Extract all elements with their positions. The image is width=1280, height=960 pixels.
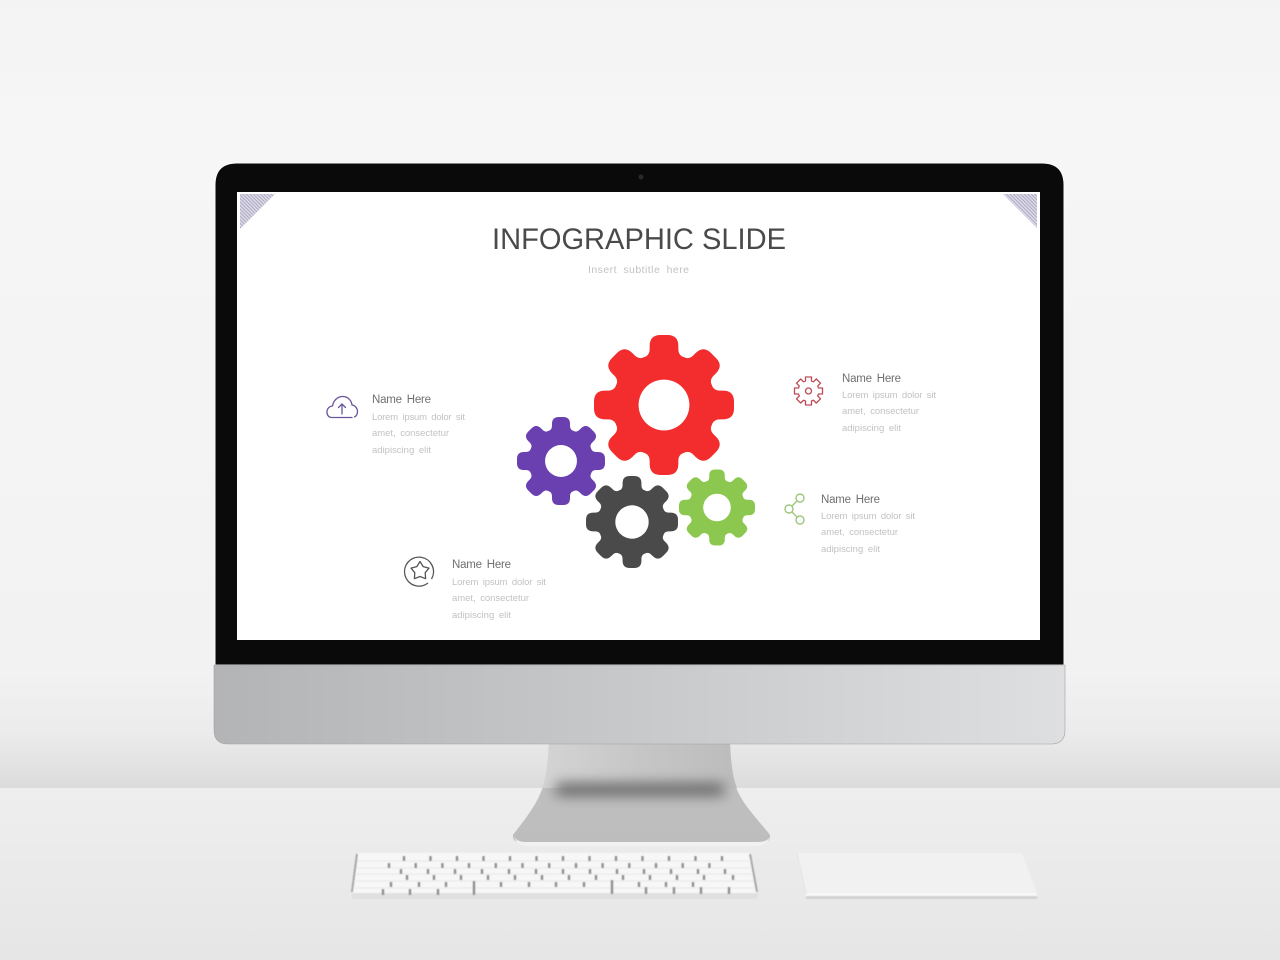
- keyboard: [352, 853, 758, 899]
- text: name: Name Here: [372, 394, 431, 406]
- text: description: [452, 577, 546, 621]
- text: description: Lorem ipsum dolor sit: [842, 390, 936, 401]
- text: description: [821, 511, 915, 555]
- slide screen: [237, 192, 1040, 640]
- text: description: Lorem ipsum dolor sit: [372, 412, 465, 423]
- red gear: [594, 335, 734, 475]
- icon: share nodes: [785, 494, 804, 524]
- purple gear: [517, 417, 605, 505]
- item: settings: [794, 373, 936, 434]
- keyboard key gaps: [383, 856, 733, 895]
- text: description: amet, consectetur: [821, 527, 898, 538]
- webcam: [638, 174, 644, 180]
- corner decoration right: [1003, 194, 1037, 228]
- title: INFOGRAPHIC SLIDE: [492, 223, 786, 256]
- item: upload: [327, 394, 465, 456]
- green gear: [679, 470, 755, 546]
- monitor stand: [513, 744, 770, 846]
- subtitle: Insert subtitle here: [588, 264, 689, 276]
- trackpad: [797, 853, 1037, 899]
- icon: star in circle: [405, 557, 434, 586]
- text: description: adipiscing elit: [372, 445, 431, 456]
- text: name: Name Here: [452, 559, 511, 571]
- text: description: adipiscing elit: [821, 544, 880, 555]
- text: name: Name Here: [821, 494, 880, 506]
- text: description: [372, 412, 465, 456]
- dark gear: [586, 476, 678, 568]
- gear cluster: [517, 335, 755, 568]
- text: name: Name Here: [842, 373, 901, 385]
- monitor: [214, 163, 1065, 744]
- item: favourite: [405, 557, 546, 621]
- text: description: Lorem ipsum dolor sit: [452, 577, 546, 588]
- text: description: [842, 390, 936, 434]
- icon: gear outline: [794, 377, 822, 405]
- text: description: adipiscing elit: [842, 423, 901, 434]
- icon: cloud upload: [327, 396, 358, 418]
- monitor bezel: [215, 163, 1064, 665]
- item: share: [785, 494, 915, 555]
- text: description: amet, consectetur: [842, 406, 919, 417]
- text: description: amet, consectetur: [452, 593, 529, 604]
- text: description: amet, consectetur: [372, 428, 449, 439]
- text: description: adipiscing elit: [452, 610, 511, 621]
- text: description: Lorem ipsum dolor sit: [821, 511, 915, 522]
- corner decoration left: [240, 194, 275, 229]
- monitor chin: [214, 665, 1065, 744]
